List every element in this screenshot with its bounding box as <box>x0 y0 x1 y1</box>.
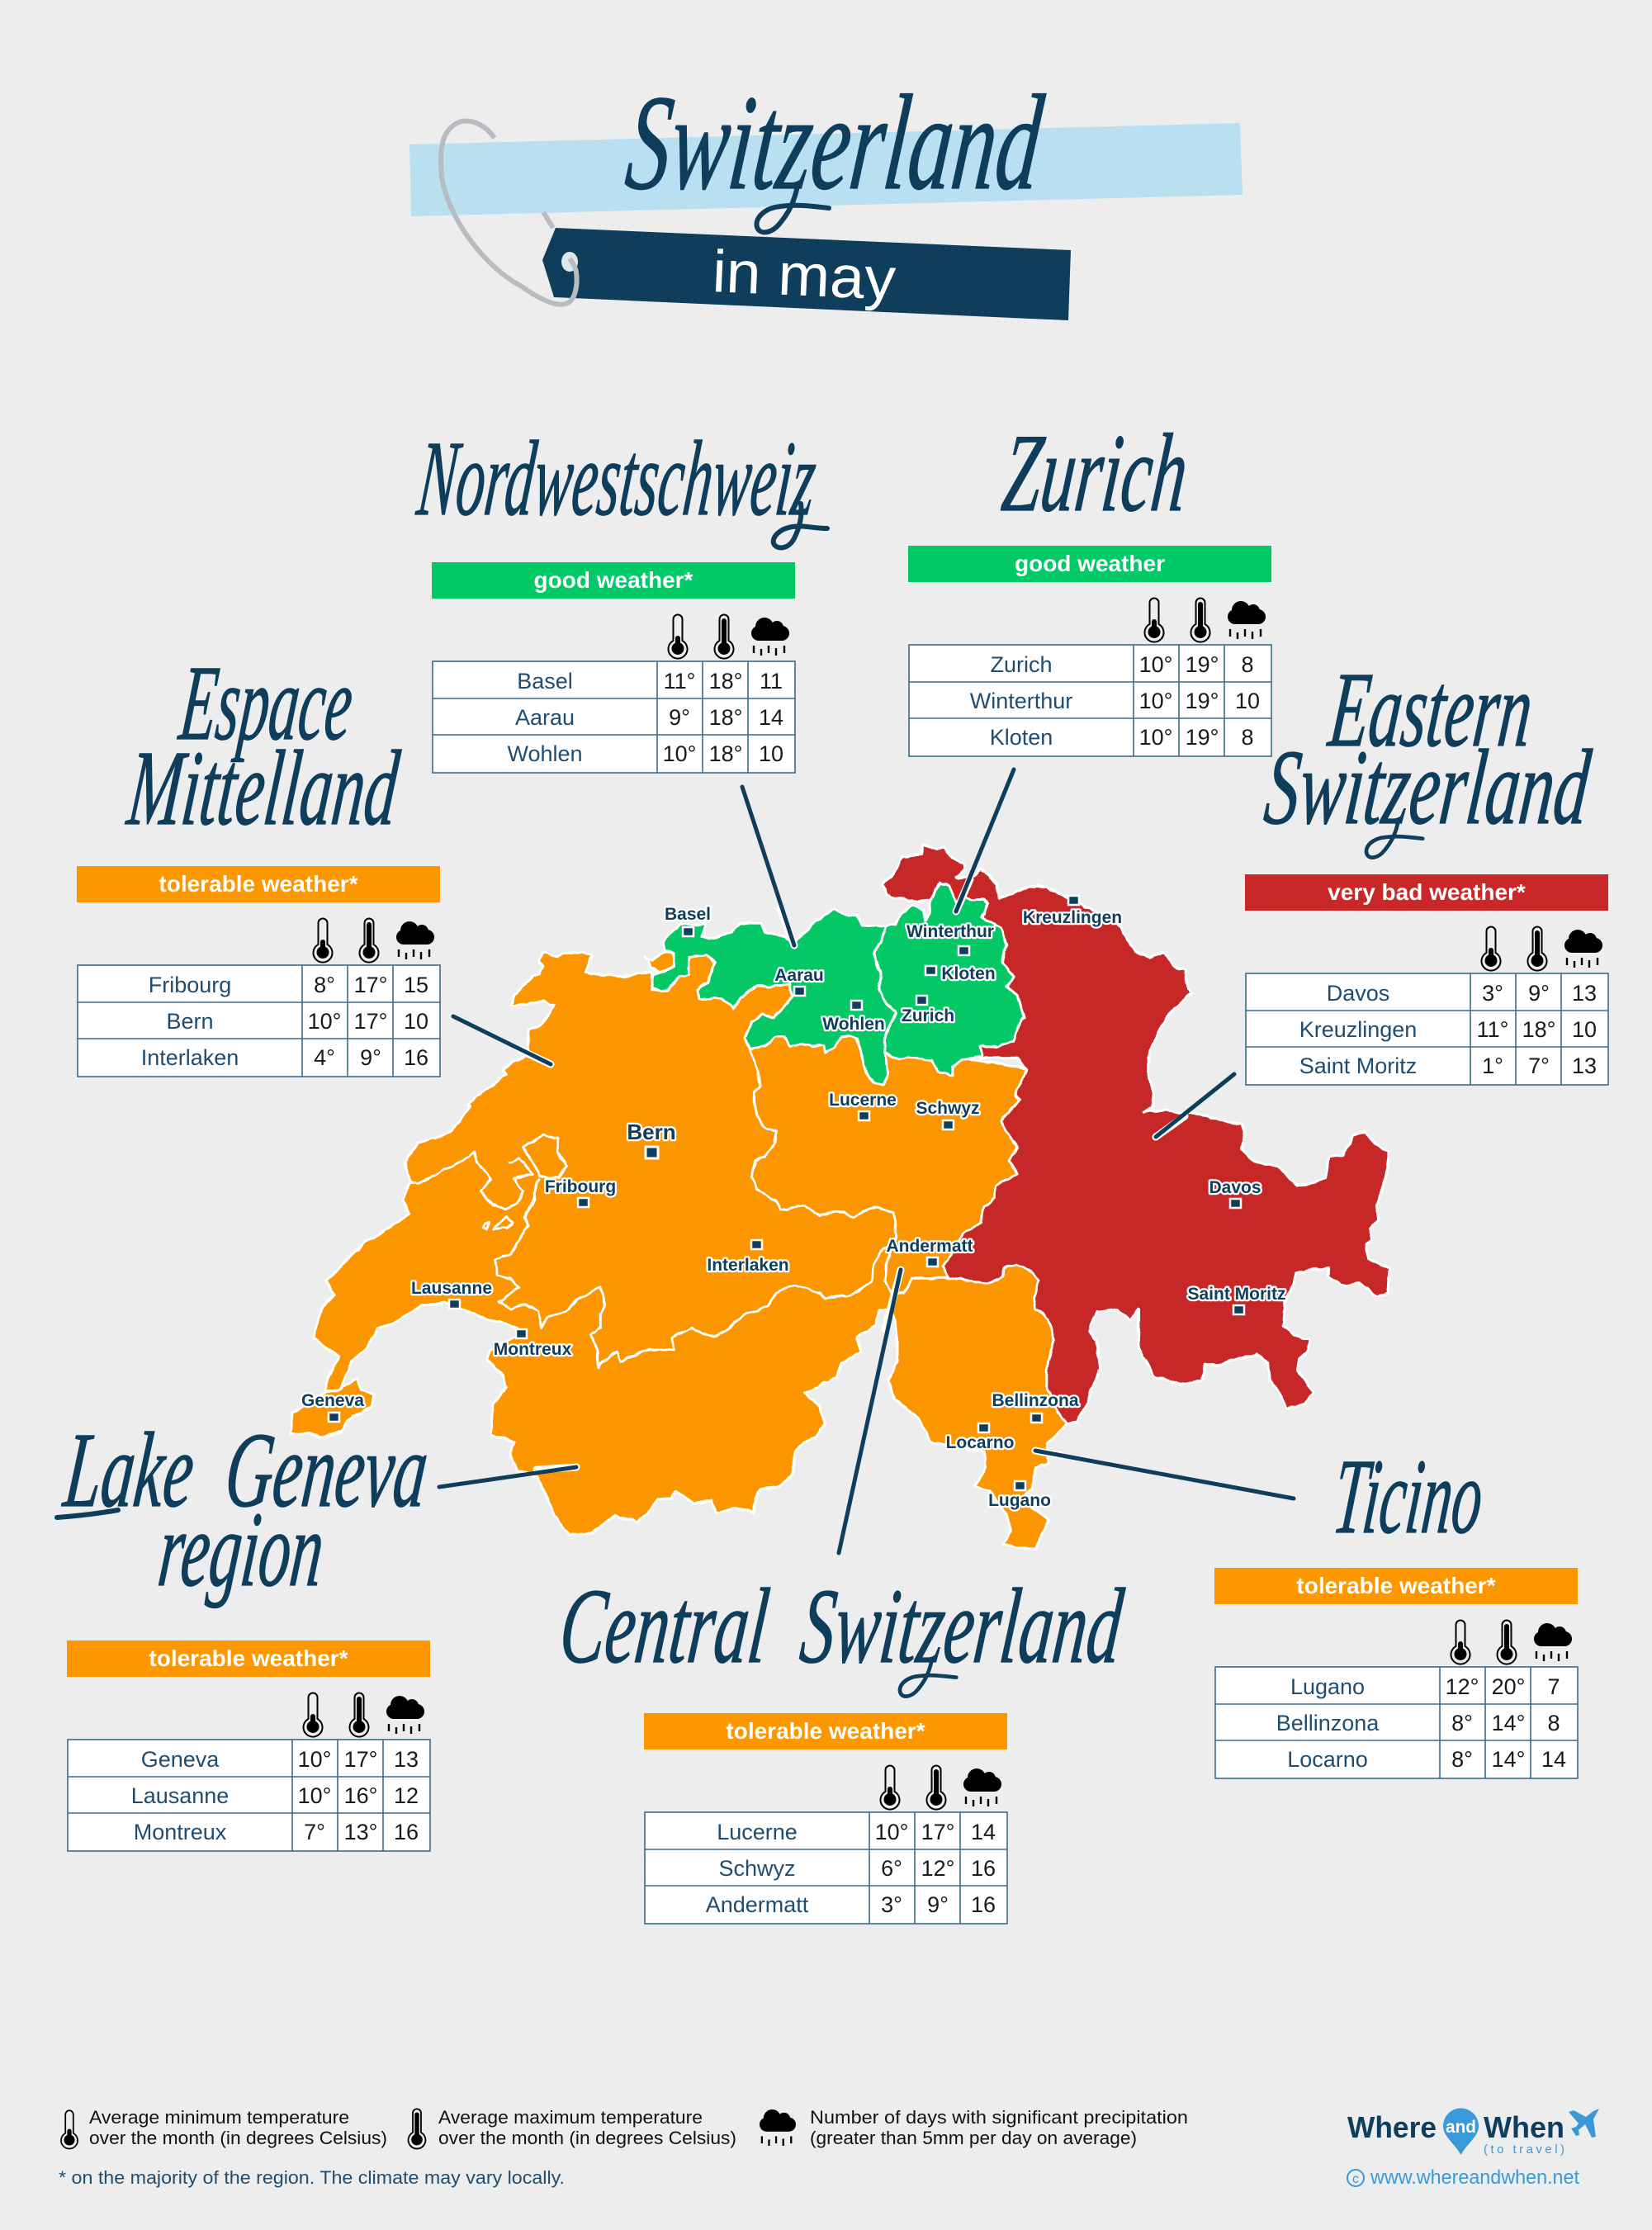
heading: Lake Geneva: Lake Geneva <box>59 1411 433 1530</box>
city: Lugano <box>988 1481 1051 1510</box>
table: 18° <box>1522 1017 1555 1042</box>
title band <box>409 123 1243 216</box>
table: 10 <box>404 1009 428 1034</box>
table: 13° <box>344 1820 377 1844</box>
table: 7° <box>304 1820 325 1844</box>
panel: Zurich <box>908 411 1271 756</box>
heading: Central Switzerland: Central Switzerland <box>555 1567 1129 1686</box>
table: 19° <box>1186 689 1219 713</box>
table: 16° <box>344 1783 377 1808</box>
table: 18° <box>709 705 742 730</box>
legend <box>59 2107 1188 2188</box>
logo text: Where <box>1347 2110 1437 2144</box>
table: Saint Moritz <box>1299 1053 1417 1078</box>
panel: Ticino <box>1214 1437 1578 1778</box>
table: 8 <box>1547 1711 1560 1735</box>
city: Aarau <box>774 966 824 996</box>
panel: Nordwestschweiz <box>412 419 827 773</box>
table: 17° <box>344 1747 377 1772</box>
rating bar <box>77 866 440 902</box>
table: 16 <box>404 1045 428 1070</box>
city: Bern <box>627 1120 676 1158</box>
connector: Espace Mittelland <box>453 1016 551 1064</box>
rating bar: tolerable weather* <box>159 871 358 897</box>
region: Geneva canton <box>291 1378 374 1437</box>
heading: Zurich: Zurich <box>997 411 1194 535</box>
table: Kloten <box>990 725 1053 750</box>
table: 9° <box>1528 981 1550 1006</box>
website: www.whereandwhen.net <box>1370 2166 1579 2189</box>
footnote: * on the majority of the region. The climate may vary locally. <box>59 2167 565 2188</box>
city: Lucerne <box>829 1091 897 1120</box>
table: 15 <box>404 973 428 997</box>
city: Kreuzlingen: Kreuzlingen <box>1023 908 1122 927</box>
table: 1° <box>1482 1053 1503 1078</box>
legend: minimum temperature: over the month (in degrees Celsius) <box>89 2128 387 2148</box>
tag string <box>441 121 577 305</box>
city: Basel: Basel <box>665 905 711 924</box>
rating bar <box>67 1641 430 1677</box>
table: 9° <box>669 705 690 730</box>
rating bar: good weather <box>1015 551 1165 576</box>
table: 10 <box>1235 689 1260 713</box>
table: 8° <box>314 973 335 997</box>
city: Bellinzona <box>992 1391 1079 1423</box>
city: Geneva: Geneva <box>301 1391 364 1410</box>
table: 9° <box>927 1892 949 1917</box>
table: 9° <box>360 1045 381 1070</box>
table: Schwyz <box>718 1856 796 1881</box>
table: Locarno <box>1287 1747 1368 1772</box>
city: Interlaken: Interlaken <box>707 1256 789 1275</box>
legend: maximum temperature: Average maximum temperature <box>438 2107 703 2128</box>
heading: region: region <box>154 1490 329 1609</box>
table: 14° <box>1492 1711 1525 1735</box>
table: 11° <box>664 669 695 694</box>
table: 16 <box>971 1892 996 1917</box>
table: 19° <box>1186 652 1219 677</box>
table: 8 <box>1241 725 1254 750</box>
rating bar <box>432 562 795 599</box>
city: Bern: Bern <box>627 1120 676 1144</box>
city: Schwyz: Schwyz <box>916 1099 980 1118</box>
table: Davos <box>1327 981 1389 1006</box>
city: Lucerne: Lucerne <box>829 1091 897 1110</box>
city: Kreuzlingen <box>1023 896 1122 927</box>
table: 16 <box>971 1856 996 1881</box>
table: 4° <box>314 1045 335 1070</box>
region: orange (Espace Mittelland, Lake Geneva, Central, Ticino) <box>313 951 1067 1548</box>
city: Locarno <box>946 1423 1014 1452</box>
table: 12° <box>921 1856 954 1881</box>
city: Davos <box>1209 1178 1261 1208</box>
table: 11° <box>1477 1017 1508 1042</box>
city: Winterthur: Winterthur <box>906 922 994 941</box>
table: 8 <box>1241 652 1254 677</box>
table: 17° <box>354 1009 387 1034</box>
city: Wohlen <box>822 1001 885 1034</box>
table: Basel <box>517 669 573 694</box>
legend: minimum temperature: Average minimum temperature <box>89 2107 349 2128</box>
panel: Central Switzerland <box>555 1567 1129 1924</box>
icons <box>1481 926 1602 971</box>
table: Bellinzona <box>1276 1711 1380 1735</box>
rating bar <box>1245 874 1608 911</box>
table: 10° <box>663 741 696 766</box>
table: 16 <box>394 1820 419 1844</box>
city: Lausanne: Lausanne <box>411 1279 492 1298</box>
rating bar <box>644 1713 1007 1749</box>
city: Aarau: Aarau <box>774 966 824 985</box>
table: Winterthur <box>970 689 1072 713</box>
table: Lucerne <box>717 1820 798 1844</box>
connector: Zurich <box>956 769 1014 911</box>
city: Wohlen: Wohlen <box>822 1015 885 1034</box>
table: 20° <box>1492 1674 1525 1699</box>
icons <box>1451 1620 1572 1664</box>
panel: Eastern Switzerland <box>1245 651 1608 1085</box>
logo: Where and When: (to travel) <box>1484 2142 1564 2157</box>
city: Montreux: Montreux <box>494 1340 572 1359</box>
table: 7 <box>1547 1674 1560 1699</box>
legend: precipitation <box>760 2107 1188 2148</box>
rating bar: tolerable weather* <box>1296 1573 1496 1598</box>
table: Kreuzlingen <box>1299 1017 1417 1042</box>
icons <box>1144 598 1266 642</box>
luggage tag <box>542 228 1071 320</box>
rating bar <box>1214 1568 1578 1604</box>
table: 3° <box>881 1892 902 1917</box>
table <box>645 1812 1007 1924</box>
icons <box>314 918 434 963</box>
city: Montreux <box>494 1329 572 1359</box>
table: 6° <box>881 1856 902 1881</box>
city: Zurich: Zurich <box>902 1006 954 1025</box>
logo plane <box>1569 2109 1599 2138</box>
city: Saint Moritz <box>1187 1285 1286 1314</box>
table: 8° <box>1451 1711 1473 1735</box>
connector: Nordwestschweiz <box>742 787 794 945</box>
city: Fribourg: Fribourg <box>545 1177 616 1196</box>
table: Geneva <box>141 1747 220 1772</box>
city: Fribourg <box>545 1177 616 1207</box>
heading: Espace: Espace <box>174 644 358 763</box>
rating bar: very bad weather* <box>1328 879 1526 905</box>
table: Montreux <box>134 1820 227 1844</box>
region: Zurich (green) <box>873 883 1025 1076</box>
table: 10° <box>308 1009 341 1034</box>
city: Lausanne <box>411 1279 492 1309</box>
connector: Lake Geneva region <box>439 1467 576 1487</box>
logo pin <box>1443 2109 1479 2155</box>
map of Switzerland <box>291 845 1389 1548</box>
table: 18° <box>709 669 742 694</box>
table: 12 <box>394 1783 419 1808</box>
table: 17° <box>921 1820 954 1844</box>
copyright letter: c <box>1352 2172 1359 2186</box>
table: 7° <box>1528 1053 1550 1078</box>
logo: Where and When: and <box>1446 2118 1476 2137</box>
exclave: orange near Basel <box>645 952 675 973</box>
table: 10° <box>1139 725 1172 750</box>
city: Lugano: Lugano <box>988 1491 1051 1510</box>
legend: precipitation: Number of days with significant precipitation <box>810 2107 1188 2128</box>
table: Interlaken <box>141 1045 239 1070</box>
table <box>909 645 1271 756</box>
table: 14 <box>1541 1747 1566 1772</box>
table: Andermatt <box>706 1892 809 1917</box>
table <box>433 661 795 773</box>
heading: Nordwestschweiz: Nordwestschweiz <box>412 419 821 538</box>
table: 11 <box>760 669 783 694</box>
table: 3° <box>1482 981 1503 1006</box>
legend: maximum temperature <box>409 2107 736 2149</box>
table: 17° <box>354 973 387 997</box>
city: Andermatt <box>886 1237 973 1267</box>
city: Saint Moritz: Saint Moritz <box>1187 1285 1286 1304</box>
map regions <box>291 845 1389 1548</box>
table: 14 <box>759 705 783 730</box>
city: Kloten: Kloten <box>941 964 996 983</box>
table: 10° <box>1139 689 1172 713</box>
table: Wohlen <box>507 741 583 766</box>
connector: Central Switzerland <box>839 1270 901 1553</box>
city: Locarno: Locarno <box>946 1433 1014 1452</box>
city: Geneva <box>301 1391 364 1422</box>
logo: Where and When: When <box>1484 2110 1564 2144</box>
heading: Mittelland: Mittelland <box>122 729 405 848</box>
connector: Ticino <box>1035 1451 1294 1499</box>
icons <box>880 1765 1001 1810</box>
heading: Ticino: Ticino <box>1328 1437 1489 1556</box>
connector: Eastern Switzerland <box>1156 1074 1234 1137</box>
city: Bellinzona: Bellinzona <box>992 1391 1079 1410</box>
table: 10° <box>298 1747 331 1772</box>
table: Aarau <box>515 705 575 730</box>
table: Zurich <box>990 652 1053 677</box>
city: Davos: Davos <box>1209 1178 1261 1197</box>
icons <box>669 614 789 659</box>
legend: maximum temperature: over the month (in degrees Celsius) <box>438 2128 736 2148</box>
legend: minimum temperature <box>61 2107 387 2149</box>
tag hole <box>561 252 578 272</box>
region borders <box>410 1039 949 1368</box>
table: Bern <box>166 1009 214 1034</box>
region: Nordwestschweiz (green) <box>652 910 896 1084</box>
table: 14° <box>1492 1747 1525 1772</box>
region: Eastern Switzerland (red) <box>883 845 1389 1423</box>
table: 13 <box>394 1747 419 1772</box>
title block <box>409 67 1243 320</box>
table: Fribourg <box>149 973 231 997</box>
table: Lausanne <box>131 1783 229 1808</box>
city: Interlaken <box>707 1240 789 1275</box>
rating bar <box>908 546 1271 582</box>
city: Andermatt: Andermatt <box>886 1237 973 1256</box>
title: Switzerland: Switzerland <box>620 67 1049 218</box>
table <box>1215 1667 1578 1778</box>
panel: Espace Mittelland <box>77 644 440 1077</box>
logo: Where and When <box>1347 2109 1599 2189</box>
table: 13 <box>1572 981 1597 1006</box>
legend: precipitation: (greater than 5mm per day on average) <box>810 2128 1137 2148</box>
table: 8° <box>1451 1747 1473 1772</box>
table: 14 <box>971 1820 996 1844</box>
table: 19° <box>1186 725 1219 750</box>
table <box>68 1740 430 1851</box>
subtitle: in may: in may <box>711 239 897 313</box>
copyright mark <box>1347 2170 1364 2186</box>
table: 10 <box>1572 1017 1597 1042</box>
table: 10° <box>875 1820 908 1844</box>
table: 18° <box>709 741 742 766</box>
table: 10° <box>298 1783 331 1808</box>
icons <box>304 1693 424 1737</box>
table <box>1246 973 1608 1085</box>
rating bar: tolerable weather* <box>149 1645 348 1671</box>
rating bar: tolerable weather* <box>726 1718 925 1744</box>
table: Lugano <box>1290 1674 1365 1699</box>
panel: Lake Geneva region <box>57 1411 433 1851</box>
rating bar: good weather* <box>534 567 693 593</box>
table: 10 <box>759 741 783 766</box>
city: Basel <box>665 905 711 936</box>
city: Winterthur <box>906 922 994 955</box>
table: 10° <box>1139 652 1172 677</box>
city: Schwyz <box>916 1099 980 1129</box>
table: 12° <box>1446 1674 1479 1699</box>
table: 13 <box>1572 1053 1597 1078</box>
table <box>78 965 440 1077</box>
city: Zurich <box>902 996 954 1025</box>
